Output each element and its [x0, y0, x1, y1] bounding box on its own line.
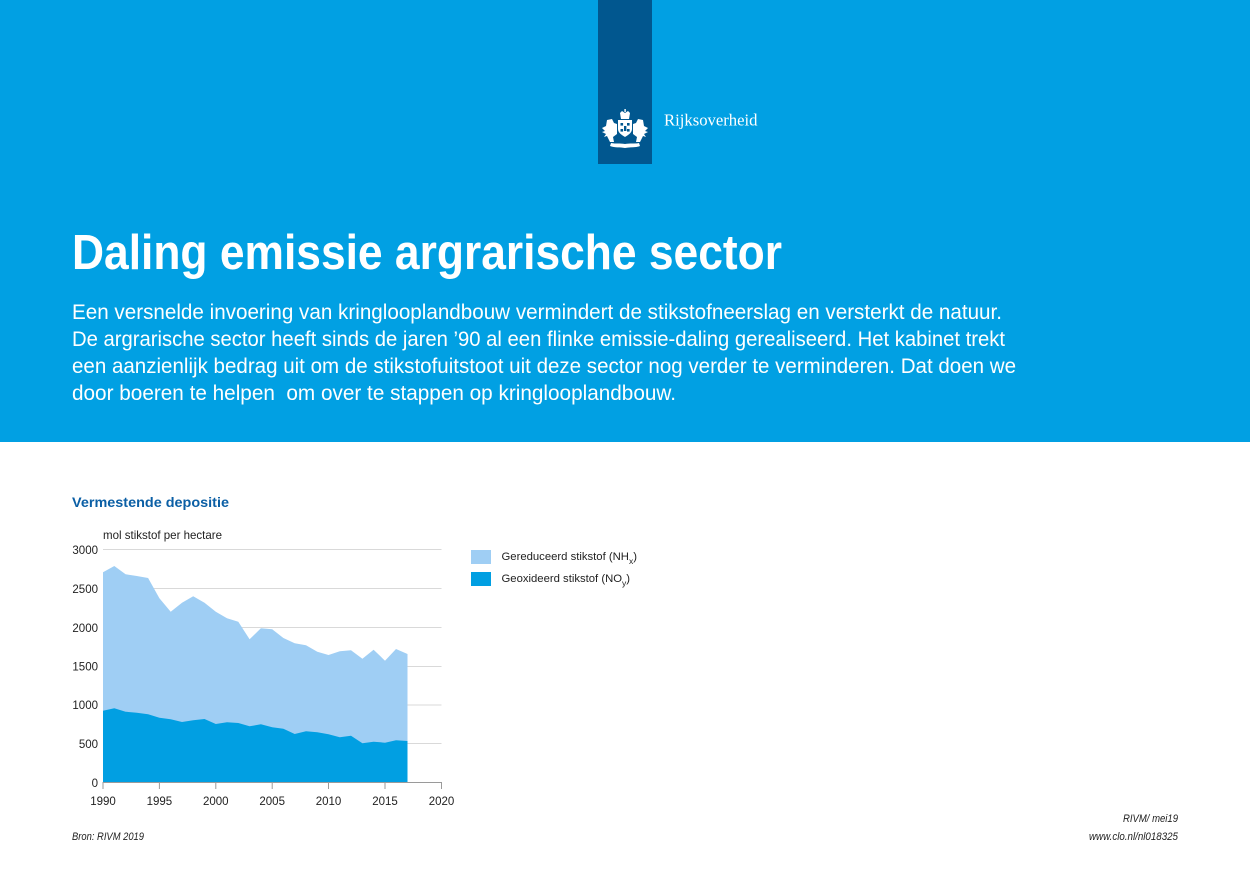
legend item: gereduceerd: )	[633, 551, 637, 563]
x axis labels: 1995	[147, 796, 172, 808]
credit	[1089, 813, 1179, 843]
y axis labels: 1000	[72, 700, 98, 712]
intro text	[72, 300, 1016, 405]
title: Daling emissie argrarische sector	[72, 226, 782, 280]
legend item: geoxideerd	[471, 572, 630, 588]
x axis labels: 2020	[429, 796, 454, 808]
icon: coat of arms	[602, 109, 648, 148]
intro text: Een versnelde invoering van kringlooplandbouw vermindert de stikstofneerslag en versterkt de natuur.	[72, 300, 1002, 324]
legend item: geoxideerd: Geoxideerd stikstof (NO	[502, 573, 622, 585]
x axis labels: 2010	[316, 796, 341, 808]
legend item: gereduceerd: x	[629, 556, 634, 566]
y axis labels: 3000	[72, 545, 98, 557]
x axis labels	[90, 796, 454, 808]
x axis	[103, 782, 442, 789]
y axis labels: 1500	[72, 662, 98, 674]
area: gereduceerd stikstof	[103, 566, 408, 782]
y axis unit label: mol stikstof per hectare	[103, 528, 222, 542]
credit: www.clo.nl/nl018325	[1089, 831, 1179, 843]
logo wordmark: Rijksoverheid	[664, 110, 758, 130]
x axis labels: 2000	[203, 796, 229, 808]
intro text: De argrarische sector heeft sinds de jaren ’90 al een flinke emissie-daling gerealiseerd. Het kabinet trekt	[72, 327, 1005, 351]
area chart	[72, 528, 454, 808]
intro text: een aanzienlijk bedrag uit om de stikstofuitstoot uit deze sector nog verder te verminderen. Dat doen we	[72, 354, 1016, 378]
source note: Bron: RIVM 2019	[72, 831, 144, 843]
y axis labels: 0	[92, 778, 98, 790]
header panel	[0, 0, 1250, 442]
legend item: geoxideerd: y	[622, 578, 627, 588]
legend	[471, 550, 637, 588]
y axis labels: 2000	[72, 623, 98, 635]
x axis labels: 2005	[259, 796, 285, 808]
area: geoxideerd stikstof	[103, 708, 408, 782]
y axis labels: 500	[79, 739, 98, 751]
credit: RIVM/ mei19	[1123, 813, 1178, 825]
y axis labels: 2500	[72, 584, 98, 596]
legend item: geoxideerd: )	[626, 573, 630, 585]
logo ribbon with crest	[598, 0, 652, 164]
legend item: gereduceerd: Gereduceerd stikstof (NH	[502, 551, 629, 563]
y axis labels	[72, 545, 98, 790]
legend item: gereduceerd	[471, 550, 637, 566]
chart heading: Vermestende depositie	[72, 494, 229, 510]
x axis labels: 2015	[372, 796, 398, 808]
intro text: door boeren te helpen om over te stappen op kringlooplandbouw.	[72, 381, 676, 405]
x axis labels: 1990	[90, 796, 116, 808]
